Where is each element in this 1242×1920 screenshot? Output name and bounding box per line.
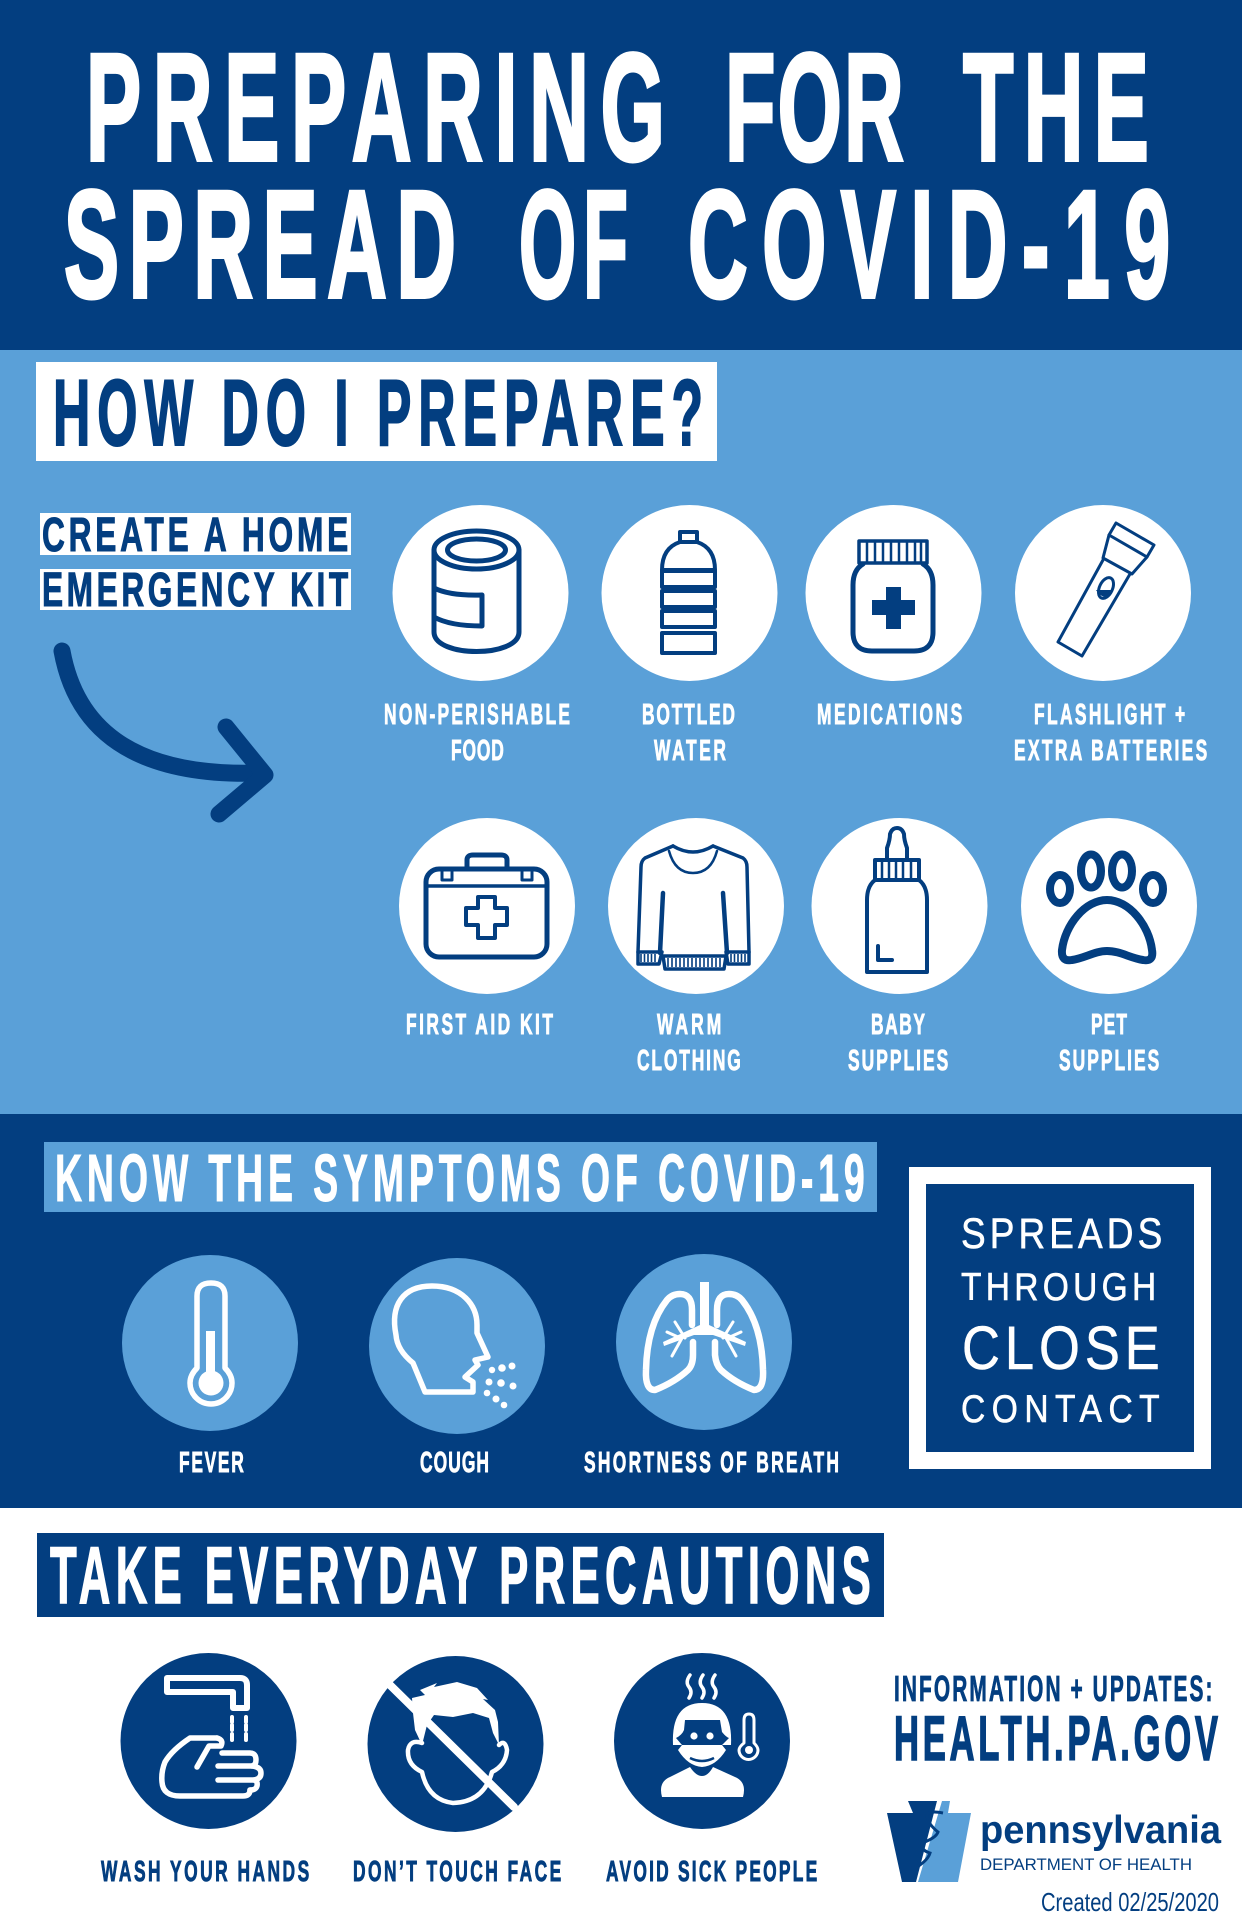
icon: baby bottle [812,818,988,994]
subheading: create a home emergency kit: CREATE A HOME [42,507,348,562]
icon: avoid sick people [614,1653,790,1829]
heading: how do I prepare: HOW DO I PREPARE? [53,361,703,466]
label: flashlight: EXTRA BATTERIES [1014,735,1207,767]
icon: food can [392,505,568,681]
label: wash hands: WASH YOUR HANDS [101,1856,309,1888]
panel: how do I prepare [0,350,1242,1114]
label: water: WATER [654,735,726,767]
logo: pennsylvania department of health: pennsylvania [980,1809,1221,1852]
label: food [384,699,570,767]
icon: water bottle [602,505,778,681]
title: OF [519,159,628,330]
label: medications: MEDICATIONS [817,699,962,731]
label: don't touch face: DON’T TOUCH FACE [353,1856,561,1888]
icon: first aid kit [399,818,575,994]
label: pet supplies: PET [1091,1009,1127,1041]
icon: paw [1021,818,1197,994]
label: first aid: FIRST AID KIT [406,1009,553,1041]
heading: take everyday precautions: TAKE EVERYDAY PRECAUTIONS [50,1530,871,1620]
icon: fever thermometer [122,1255,298,1431]
icon: flashlight [1015,505,1191,681]
title: THE [963,23,1149,194]
logo: pennsylvania department of health [887,1801,1221,1882]
label: water: BOTTLED [642,699,735,731]
callout: spreads through close contact: CLOSE [962,1314,1160,1383]
icon: don't touch face [368,1656,544,1832]
label: pet supplies [1059,1009,1159,1077]
icon: medication jar [806,505,982,681]
label: baby supplies: BABY [871,1009,925,1041]
panel: precautions [0,1508,1242,1920]
icon: wash hands [120,1653,296,1829]
title: FOR [725,23,904,194]
icon: warm clothing [608,818,784,994]
label: food: NON-PERISHABLE [384,699,570,731]
label: baby supplies [848,1009,948,1077]
arrow [62,651,265,814]
label: baby supplies: SUPPLIES [848,1045,948,1077]
title: PREPARING [86,23,665,194]
label: fever: FEVER [179,1447,244,1479]
label: avoid sick people: AVOID SICK PEOPLE [606,1856,817,1888]
callout: spreads through close contact: CONTACT [961,1387,1160,1431]
callout: spreads through close contact: THROUGH [961,1265,1156,1309]
icon: cough [369,1258,545,1434]
heading: know the symptoms: KNOW THE SYMPTOMS OF COVID-19 [55,1141,865,1216]
title [64,23,1170,331]
icon: lungs [616,1254,792,1430]
panel: symptoms [0,1114,1242,1508]
callout: spreads through close contact: SPREADS [961,1210,1162,1258]
subheading: create a home emergency kit [40,507,351,617]
title: COVID-19 [688,160,1170,331]
callout: spreads through close contact [918,1176,1202,1460]
label: cough: COUGH [420,1447,489,1479]
label: shortness of breath: SHORTNESS OF BREATH [584,1447,839,1479]
label: warm clothing [637,1009,741,1077]
label: food: FOOD [451,735,504,767]
title: SPREAD [64,160,456,331]
label: flashlight [1014,699,1207,767]
text: information + updates: INFORMATION + UPDATES: [894,1669,1212,1710]
logo: pennsylvania department of health: DEPARTMENT OF HEALTH [980,1856,1192,1874]
label: water [642,699,735,767]
label: warm clothing: CLOTHING [637,1045,741,1077]
label: pet supplies: SUPPLIES [1059,1045,1159,1077]
text: health.pa.gov: HEALTH.PA.GOV [894,1703,1218,1774]
subheading: create a home emergency kit: EMERGENCY KIT [42,562,348,617]
panel: title band [0,0,1242,350]
label: flashlight: FLASHLIGHT + [1034,699,1185,731]
label: warm clothing: WARM [657,1009,721,1041]
